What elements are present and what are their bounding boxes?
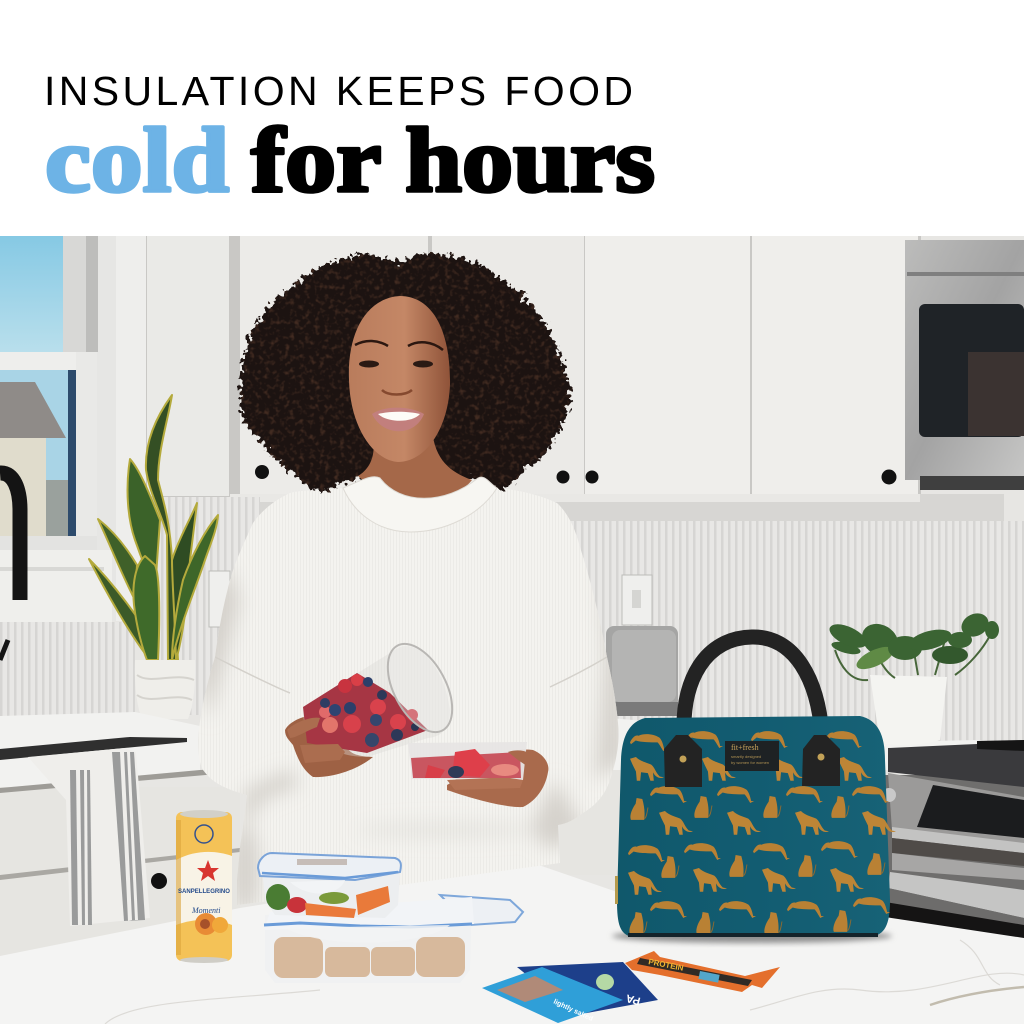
woman <box>190 252 630 920</box>
fingers under container <box>447 778 523 790</box>
title word: cold: cold <box>45 109 229 211</box>
smile <box>372 408 424 431</box>
sink faucet <box>0 473 20 660</box>
wall outlets <box>209 571 652 627</box>
sweater <box>198 488 618 904</box>
eyebrows, eyes, nose <box>355 341 443 394</box>
bag base edge <box>628 933 878 937</box>
small berry container <box>408 742 538 790</box>
bag shadow <box>612 929 892 943</box>
snake plant <box>89 395 218 660</box>
title line: insulation keeps food: INSULATION KEEPS FOOD <box>44 68 633 114</box>
handle tabs <box>664 735 840 787</box>
back counter and right side <box>560 718 1024 875</box>
fingers over cup <box>287 718 345 763</box>
leopard print <box>628 731 896 934</box>
striped dish towel <box>28 748 150 926</box>
plant pot: white wavy ceramic <box>135 660 195 719</box>
kitchen photo scene <box>0 236 1024 1024</box>
sparkling drink can: SANPELLEGRINO <box>178 888 230 895</box>
berry cup <box>287 633 465 763</box>
island marble countertop <box>0 862 1024 1024</box>
fit and fresh lunch bag <box>612 637 896 943</box>
protein bar: PROTEIN <box>648 957 684 973</box>
bag brand label: smartly designed <box>731 754 761 759</box>
snack packets: PA <box>625 991 642 1007</box>
left hand <box>285 715 373 777</box>
large container with wraps <box>264 897 474 983</box>
wall background <box>0 236 1024 1024</box>
bag body <box>617 716 890 937</box>
fingertip on container <box>508 750 538 768</box>
sleeve seams <box>215 657 607 693</box>
stove <box>882 740 1024 940</box>
microwave <box>905 240 1024 490</box>
bag brand label: by women for women <box>731 760 769 765</box>
protein bar <box>625 951 780 992</box>
flat blue lid <box>440 895 523 925</box>
ribbed backsplash <box>0 497 1024 745</box>
collar <box>343 477 497 532</box>
right potted plant <box>826 609 999 745</box>
hair <box>240 252 570 491</box>
sparkling drink can: Momenti <box>191 906 220 915</box>
bag zipper pull <box>615 876 618 904</box>
title <box>44 68 655 211</box>
title words: for hours: for hours <box>251 109 655 211</box>
bag brand label: fit+fresh <box>731 743 759 752</box>
window <box>0 236 116 622</box>
left counter with sink <box>0 712 240 957</box>
wall pillar beside window <box>116 236 146 621</box>
sparkling drink can <box>176 810 232 963</box>
small container with vegetables <box>258 853 401 918</box>
snack packets: lightly salted <box>552 998 594 1023</box>
bag brand label <box>725 741 779 771</box>
face <box>349 296 450 462</box>
right hand and palm <box>447 749 548 807</box>
neck <box>358 430 472 499</box>
toaster <box>606 626 678 716</box>
snack packets <box>482 962 658 1023</box>
bag handle <box>684 637 822 735</box>
stacked food containers <box>258 853 523 983</box>
upper cabinets <box>146 236 1004 521</box>
